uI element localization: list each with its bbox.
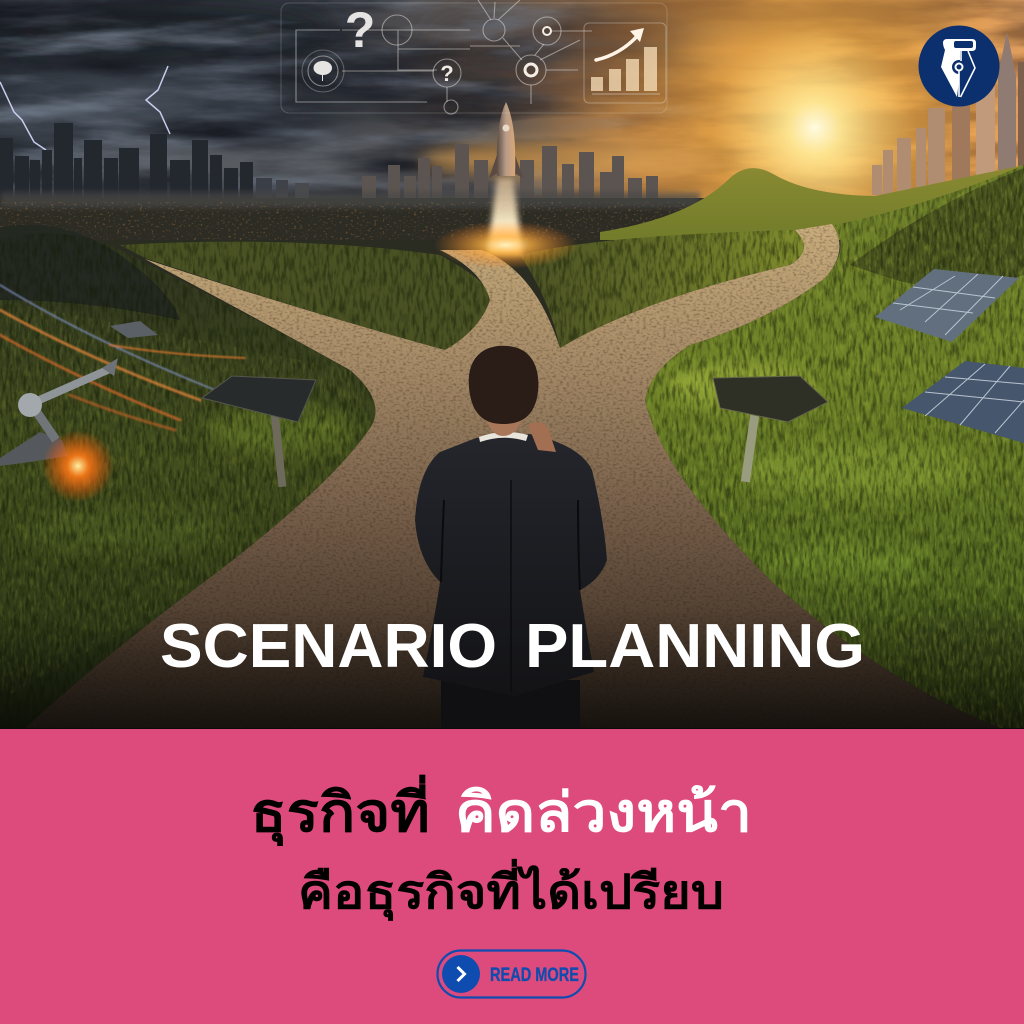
thai headline line 1 [250, 774, 752, 847]
question marks and chart: ? [345, 2, 375, 58]
grass textures [0, 165, 1024, 728]
pink footer panel [0, 729, 1024, 1024]
right grass light patches [665, 363, 1024, 670]
collar [479, 432, 528, 442]
jacket [415, 434, 607, 696]
question marks and chart [313, 2, 657, 91]
sky [0, 0, 1024, 240]
rocket launch [434, 102, 578, 269]
solar panels [875, 269, 1024, 443]
question marks and chart: ? [440, 61, 454, 86]
small solar panel left [110, 321, 158, 338]
right skyline [872, 32, 1024, 195]
title: SCENARIO PLANNING [160, 612, 865, 681]
neck and head [483, 405, 526, 436]
title: SCENARIO PLANNING: SCENARIO [160, 612, 497, 681]
green hill [600, 165, 1024, 300]
title: SCENARIO PLANNING: PLANNING [525, 612, 865, 681]
right far bank [645, 165, 1024, 728]
robot arm [0, 358, 118, 502]
left skyline [0, 123, 309, 205]
thai headline line 1: คิดล่วงหน้า [455, 783, 752, 843]
thai headline line 1: ธุรกิจที่ [250, 774, 430, 847]
read more button: READ MORE [490, 965, 579, 986]
photo scene background [0, 0, 1024, 730]
lightning bolts [0, 66, 170, 150]
left grass bank [0, 233, 376, 728]
forked road [25, 224, 1000, 728]
legs [441, 680, 580, 728]
hand at chin [528, 422, 556, 452]
businessman from behind [415, 346, 607, 728]
read more button [438, 950, 586, 998]
thai headline line 2: คือธุรกิจที่ได้เปรียบ [298, 858, 724, 921]
holographic diagram [281, 0, 667, 114]
logo badge: fountain pen nib [918, 26, 1000, 106]
centre meadow wedges [120, 242, 490, 350]
ground base [0, 240, 1024, 730]
left speed light streaks [0, 285, 245, 430]
right signpost [713, 376, 828, 482]
center skyline [362, 144, 658, 204]
distant city haze and land [0, 198, 860, 258]
left signpost [202, 376, 316, 487]
lower edge shading [0, 610, 1024, 730]
